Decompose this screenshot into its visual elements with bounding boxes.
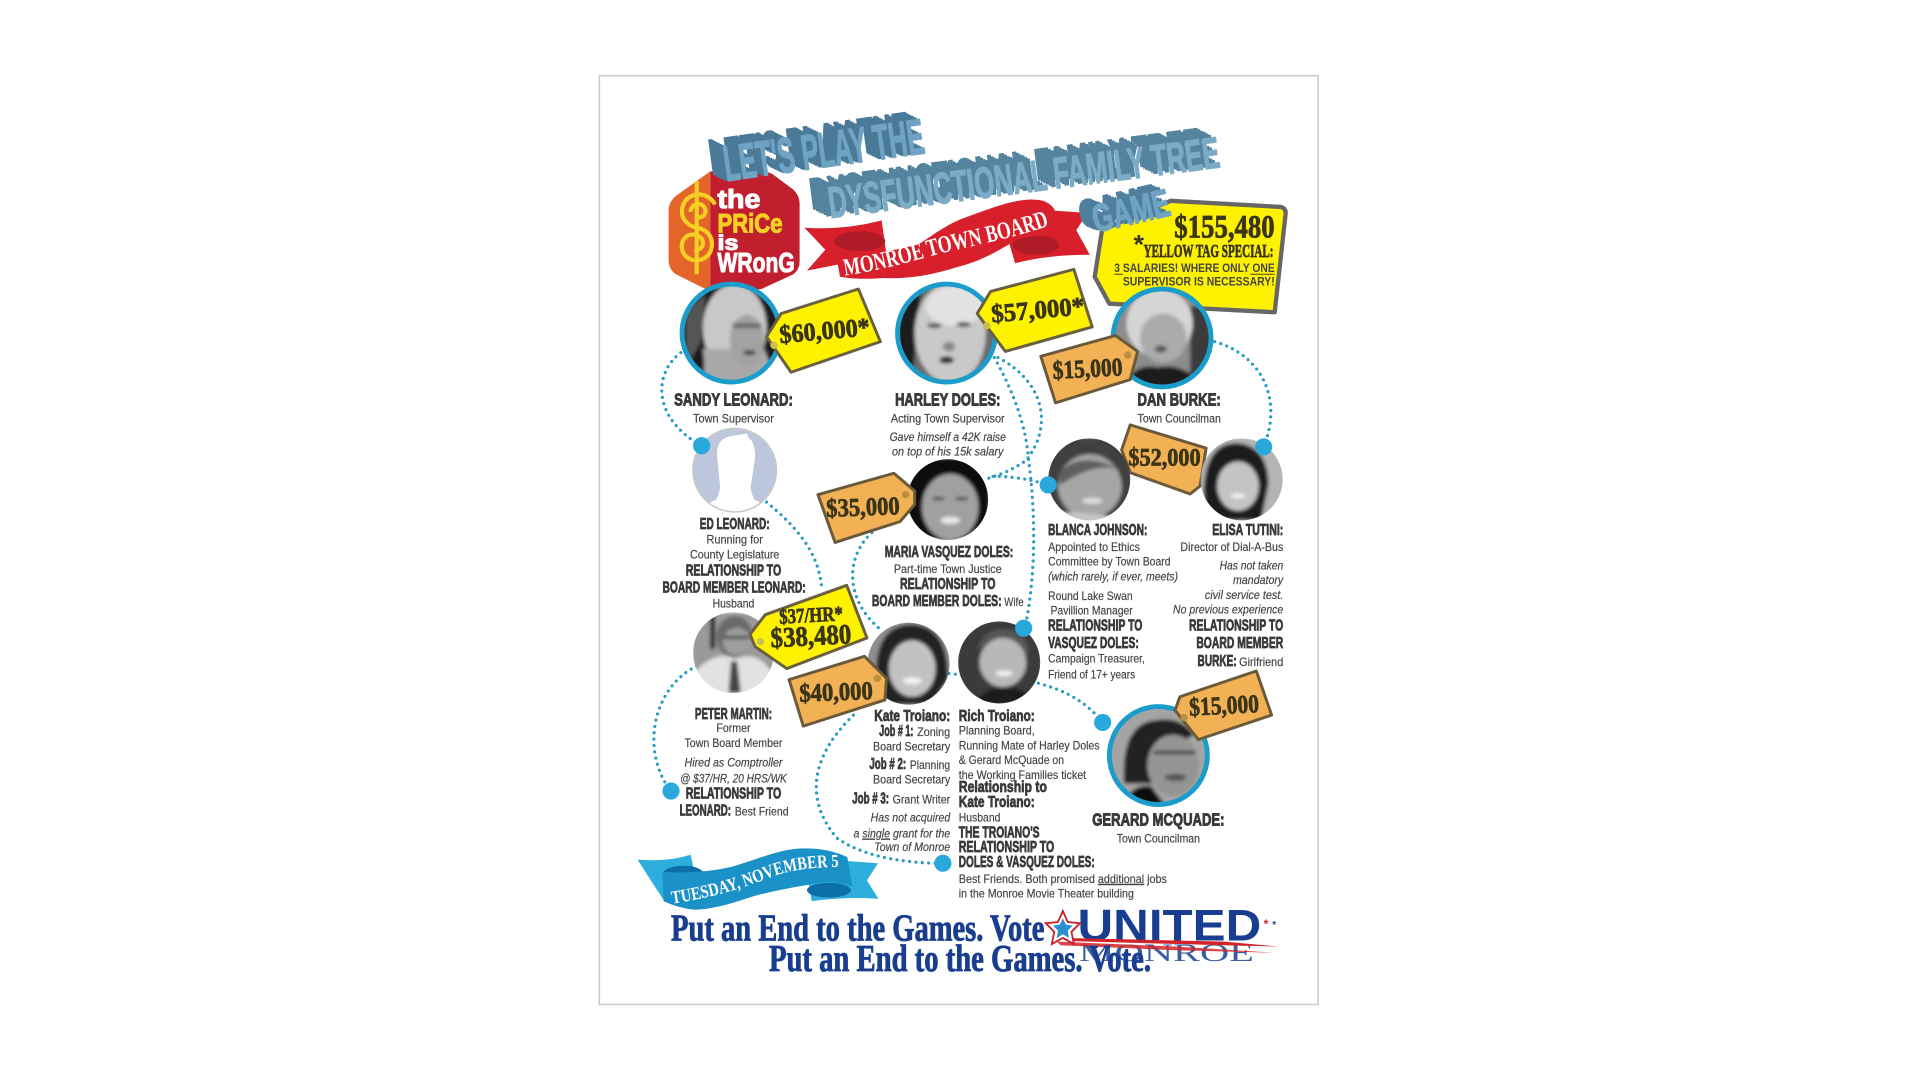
text: Ed Leonard: BOARD MEMBER LEONARD: — [662, 580, 806, 597]
price tag: $40,000: $40,000 — [799, 676, 873, 708]
title line 1: LET'S PLAY THE — [707, 103, 915, 187]
text: Kate Troiano: Town of Monroe — [874, 840, 950, 854]
text: Harley Doles: HARLEY DOLES: — [895, 389, 1000, 409]
yellow tag: salary total: 3 SALARIES! WHERE ONLY ONE — [1114, 262, 1275, 275]
dot: Blanca Johnson — [1040, 476, 1057, 493]
price tag: $60,000 — [767, 289, 880, 372]
dot: Sandy to Ed — [693, 437, 710, 454]
logo: United Monroe: * — [1264, 917, 1269, 931]
text: Gerard McQuade: Town Councilman — [1117, 831, 1200, 845]
text: Rich Troiano: DOLES & VASQUEZ DOLES: — [959, 854, 1095, 871]
text: Kate Troiano: Grant Writer — [893, 792, 950, 806]
text: Kate Troiano: Job # 3: — [852, 790, 889, 807]
title line 1: LET'S PLAY THE — [709, 104, 917, 188]
title line 2: DYSFUNCTIONAL FAMILY TREE — [812, 123, 1209, 222]
text: Peter Martin: PETER MARTIN: — [695, 706, 772, 723]
banner: Tuesday, November 5: TUESDAY, NOVEMBER 5 — [670, 854, 838, 904]
photo: Kate Troiano — [866, 621, 951, 707]
photo: Elisa Tutini — [1200, 437, 1286, 523]
text: Elisa Tutini: Has not taken — [1220, 558, 1283, 572]
text: Harley Doles — [890, 389, 1006, 459]
price tag: Dan $15,000 — [1041, 336, 1138, 403]
photo: Gerard McQuade — [1107, 704, 1210, 811]
text: Kate Troiano — [852, 708, 951, 854]
text: Ed Leonard: RELATIONSHIP TO — [686, 563, 781, 580]
text: Peter Martin: Best Friend — [735, 805, 789, 819]
text: Maria Vasquez Doles: Part-time Town Justice — [894, 562, 1002, 576]
text: Blanca Johnson: VASQUEZ DOLES: — [1048, 635, 1139, 652]
price tag: Peter Martin hourly — [750, 585, 867, 669]
text: Sandy Leonard — [674, 389, 793, 425]
price tag: Gerard $15,000: $15,000 — [1188, 689, 1260, 722]
title line 2 — [807, 118, 1222, 230]
title line 1: LET'S PLAY THE — [713, 106, 921, 189]
price tag: $35,000: $35,000 — [826, 491, 900, 523]
photo: Rich Troiano — [956, 620, 1042, 705]
title line 1: LET'S PLAY THE — [711, 105, 919, 188]
dot: Troiano relationship — [934, 855, 951, 872]
text: Kate Troiano: Zoning — [917, 725, 950, 739]
text: Gerard McQuade — [1092, 809, 1224, 845]
title line 3: GAME — [1077, 179, 1164, 238]
photo: Dan Burke — [1108, 287, 1216, 392]
text: Rich Troiano: Best Friends. Both promised additional jobs — [959, 872, 1167, 886]
text: Ed Leonard: Running for — [707, 533, 763, 547]
title line 1: LET'S PLAY THE — [720, 109, 928, 192]
text: Blanca Johnson: BLANCA JOHNSON: — [1048, 522, 1147, 539]
price tag: $52,000 — [1122, 425, 1206, 494]
title line 3: GAME — [1088, 182, 1174, 241]
text: Elisa Tutini: ELISA TUTINI: — [1212, 522, 1283, 539]
title line 2: DYSFUNCTIONAL FAMILY TREE — [825, 129, 1222, 228]
price tag: $35,000 — [818, 473, 915, 542]
text: Harley Doles: on top of his 15k salary — [892, 445, 1004, 459]
text: Dan Burke: DAN BURKE: — [1138, 389, 1221, 409]
icon: star — [1046, 911, 1080, 944]
title line 1 — [705, 100, 928, 194]
dot: Rich Troiano — [1015, 620, 1032, 637]
text: Rich Troiano: in the Monroe Movie Theater building — [959, 887, 1134, 901]
slogan — [671, 907, 1151, 980]
text: Elisa Tutini: BOARD MEMBER — [1196, 635, 1283, 652]
title line 1: LET'S PLAY THE — [717, 108, 925, 191]
title line 2: DYSFUNCTIONAL FAMILY TREE — [817, 125, 1215, 225]
text: Blanca Johnson: Committee by Town Board — [1048, 555, 1171, 569]
text: Blanca Johnson: Campaign Treasurer, — [1048, 651, 1145, 665]
icon: dollar spiral — [682, 181, 715, 274]
logo: The Price is Wrong: PRiCe — [718, 209, 782, 239]
text: Peter Martin: LEONARD: — [680, 803, 731, 820]
logo: The Price is Wrong — [669, 171, 800, 294]
text: Ed Leonard: Husband — [713, 596, 754, 610]
slogan: Put an End to the Games. Vote — [671, 907, 1044, 949]
text: Maria Vasquez Doles — [872, 544, 1024, 610]
text: Elisa Tutini — [1173, 522, 1284, 670]
photo: Blanca Johnson — [1048, 438, 1130, 520]
text: Ed Leonard: County Legislature — [690, 547, 780, 561]
text: Harley Doles: Gave himself a 42K raise — [890, 430, 1006, 444]
price tag: $57,000 — [977, 269, 1092, 351]
text: Elisa Tutini: RELATIONSHIP TO — [1189, 618, 1283, 635]
slogan: Put an End to the Games. Vote. — [769, 938, 1151, 980]
text: Blanca Johnson: Friend of 17+ years — [1048, 667, 1135, 681]
price tag: $57,000: $57,000* — [990, 291, 1085, 328]
text: Blanca Johnson: Round Lake Swan — [1048, 589, 1133, 603]
text: Peter Martin: @ $37/HR, 20 HRS/WK — [680, 771, 787, 785]
text: Blanca Johnson: (which rarely, if ever, meets) — [1048, 569, 1178, 583]
yellow tag: salary total — [1095, 201, 1286, 312]
price tag: $60,000: $60,000* — [778, 312, 871, 349]
logo: United Monroe: UNITED — [1078, 901, 1261, 950]
logo: United Monroe: * — [1272, 920, 1276, 931]
title line 2: DYSFUNCTIONAL FAMILY TREE — [807, 120, 1204, 219]
text: Ed Leonard: ED LEONARD: — [700, 516, 770, 533]
text: Blanca Johnson: Pavillion Manager — [1051, 604, 1133, 618]
price tag: $52,000: $52,000 — [1128, 442, 1201, 471]
text: Blanca Johnson: Appointed to Ethics — [1048, 540, 1140, 554]
text: Peter Martin: Former — [716, 721, 751, 735]
text: Rich Troiano: Planning Board, — [959, 724, 1035, 738]
logo: The Price is Wrong: is — [718, 232, 738, 255]
connector: dotted family tree lines — [654, 342, 1271, 863]
price tag: $40,000 — [789, 656, 887, 726]
title line 2: DYSFUNCTIONAL FAMILY TREE — [815, 124, 1212, 223]
text: Peter Martin: RELATIONSHIP TO — [686, 785, 781, 802]
text: Elisa Tutini: mandatory — [1233, 573, 1284, 587]
text: Rich Troiano: Relationship to — [959, 779, 1047, 796]
yellow tag: salary total: YELLOW TAG SPECIAL: — [1144, 241, 1273, 261]
title line 3: GAME — [1083, 181, 1169, 240]
text: Maria Vasquez Doles: RELATIONSHIP TO — [900, 576, 996, 593]
text: Harley Doles: Acting Town Supervisor — [891, 411, 1005, 425]
title line 1: LET'S PLAY THE — [715, 107, 923, 190]
text: Blanca Johnson — [1048, 522, 1178, 681]
price tag: Peter Martin hourly: $38,480 — [770, 619, 852, 654]
text: Maria Vasquez Doles: Wife — [1004, 595, 1024, 609]
text: Kate Troiano: Job # 1: — [879, 723, 913, 740]
logo: The Price is Wrong: the — [718, 186, 760, 214]
text: Rich Troiano — [959, 708, 1167, 901]
text: Kate Troiano: a single grant for the — [853, 827, 950, 841]
banner: Monroe Town Board: MONROE TOWN BOARD — [842, 212, 1047, 276]
logo: United Monroe: MONROE — [1079, 940, 1254, 967]
text: Elisa Tutini: No previous experience — [1173, 602, 1283, 616]
photo: Sandy Leonard — [680, 282, 784, 387]
photo: Harley Doles — [894, 282, 999, 387]
dot: Elisa Tutini — [1255, 438, 1272, 456]
dot: Gerard McQuade — [1094, 714, 1111, 731]
dot: Peter Martin — [662, 782, 680, 800]
banner: Monroe Town Board — [804, 200, 1090, 279]
text: Kate Troiano: Board Secretary — [873, 773, 951, 787]
text: Maria Vasquez Doles: MARIA VASQUEZ DOLES: — [885, 544, 1013, 561]
text: Peter Martin — [680, 706, 789, 820]
text: Rich Troiano: the Working Families ticket — [959, 768, 1087, 782]
photo: Peter Martin — [692, 612, 775, 698]
text: Elisa Tutini: Girlfriend — [1239, 655, 1283, 669]
text: Kate Troiano: Kate Troiano: — [874, 708, 950, 725]
icon: Ed Leonard placeholder — [693, 429, 776, 514]
text: Rich Troiano: & Gerard McQuade on — [959, 753, 1064, 767]
text: Peter Martin: Hired as Comptroller — [684, 756, 783, 770]
title line 3: GAME — [1080, 180, 1166, 239]
title line 2: DYSFUNCTIONAL FAMILY TREE — [809, 121, 1207, 221]
text: Elisa Tutini: Director of Dial-A-Bus — [1180, 540, 1283, 554]
text: Dan Burke: Town Councilman — [1138, 411, 1221, 425]
price tag: Dan $15,000: $15,000 — [1052, 352, 1123, 385]
text: Sandy Leonard: SANDY LEONARD: — [674, 389, 793, 409]
text: Kate Troiano: Has not acquired — [871, 811, 951, 825]
title line 3: GAME — [1075, 177, 1161, 237]
title: Let's Play the Dysfunctional Family Tree Game — [705, 100, 1222, 244]
text: Elisa Tutini: civil service test. — [1205, 588, 1283, 602]
text: Rich Troiano: Rich Troiano: — [959, 708, 1035, 725]
yellow tag: salary total: $155,480 — [1174, 210, 1275, 246]
title line 3 — [1075, 175, 1174, 244]
yellow tag: salary total: SUPERVISOR IS NECESSARY! — [1123, 275, 1275, 288]
text: Rich Troiano: Husband — [959, 811, 1001, 825]
price tag: Gerard $15,000 — [1175, 671, 1272, 740]
text: Kate Troiano: Planning — [910, 758, 950, 772]
text: Rich Troiano: Running Mate of Harley Doles — [959, 738, 1100, 752]
text: Elisa Tutini: BURKE: — [1198, 653, 1237, 670]
text: Blanca Johnson: RELATIONSHIP TO — [1048, 618, 1143, 635]
text: Sandy Leonard: Town Supervisor — [693, 411, 774, 425]
text: Rich Troiano: Kate Troiano: — [959, 794, 1035, 811]
text: Gerard McQuade: GERARD MCQUADE: — [1092, 809, 1224, 829]
logo: United Monroe — [1046, 901, 1278, 967]
yellow tag: salary total: * — [1134, 229, 1145, 259]
title line 2: DYSFUNCTIONAL FAMILY TREE — [820, 127, 1217, 226]
photo: Maria Vasquez Doles — [906, 458, 989, 541]
text: Kate Troiano: Job # 2: — [869, 756, 906, 773]
text: Rich Troiano: THE TROIANO'S — [959, 825, 1040, 842]
text: Dan Burke — [1138, 389, 1221, 425]
logo: The Price is Wrong: WRonG — [718, 247, 795, 278]
text: Rich Troiano: RELATIONSHIP TO — [959, 839, 1054, 856]
text: Maria Vasquez Doles: BOARD MEMBER DOLES: — [872, 593, 1002, 610]
text: Kate Troiano: Board Secretary — [873, 740, 951, 754]
banner: Tuesday, November 5 — [638, 848, 878, 910]
text: Ed Leonard — [662, 516, 806, 610]
title line 1: LET'S PLAY THE — [705, 102, 913, 186]
price tag: Peter Martin hourly: $37/HR* — [779, 601, 843, 629]
text: Peter Martin: Town Board Member — [684, 736, 782, 750]
poster frame — [599, 76, 1318, 1004]
